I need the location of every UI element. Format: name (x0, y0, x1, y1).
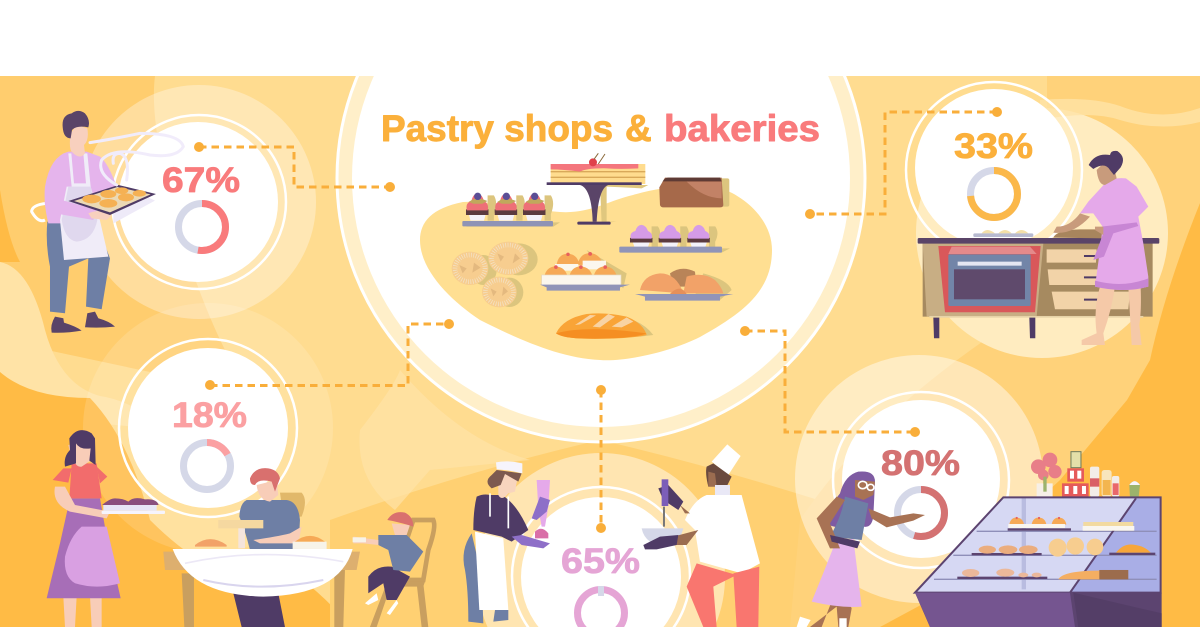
title: Pastry shops (381, 108, 613, 149)
pastries lower shelf (957, 569, 1128, 579)
connector 33% (810, 112, 997, 214)
donut 18% (184, 442, 230, 490)
donut 33% (970, 170, 1018, 218)
tray of dough (973, 230, 1033, 237)
family at table (47, 430, 434, 627)
trousers (47, 222, 110, 313)
circle 80% (795, 355, 1043, 603)
chocolate loaf (659, 178, 729, 207)
connector 67% (199, 147, 390, 187)
cabinet base (915, 593, 1162, 627)
red cupcakes (462, 193, 560, 227)
tray with croissants (68, 185, 156, 223)
arms (1053, 213, 1103, 235)
sweater (45, 152, 117, 223)
donut 67% (178, 204, 226, 250)
woman at oven counter (918, 151, 1159, 345)
circle 65% (477, 453, 725, 627)
layer cake on stand (547, 153, 648, 225)
value 80%: 80% (881, 444, 960, 483)
display case (915, 497, 1162, 627)
woman with cupcakes (47, 430, 165, 627)
value 65%: 65% (561, 542, 640, 581)
baker man with tray (32, 111, 183, 333)
connector dots (194, 107, 1002, 533)
croissants plate (635, 269, 733, 301)
counter (918, 238, 1159, 338)
donut 80% (898, 490, 944, 536)
head (70, 125, 88, 156)
title: & (625, 108, 652, 149)
head (1097, 163, 1117, 185)
connector 80% (745, 331, 915, 432)
value 67%: 67% (162, 161, 240, 200)
purple cupcakes (619, 225, 730, 253)
two pastry chefs (463, 444, 760, 627)
legs (1082, 287, 1142, 345)
connector lines (199, 112, 997, 528)
tray of buns (540, 250, 630, 291)
pastries top shelf (1008, 517, 1134, 531)
man at table (233, 468, 305, 627)
circle 33% (906, 82, 1082, 258)
value 33%: 33% (954, 127, 1033, 166)
shopper (797, 471, 925, 627)
pretzel rolls (452, 242, 538, 307)
rolling pin dough (1053, 229, 1105, 238)
shopper and display case (797, 452, 1162, 627)
dress (1080, 178, 1148, 290)
pastries middle shelf (972, 537, 1155, 557)
female pastry chef (463, 461, 550, 623)
table spread (163, 520, 360, 627)
arm (45, 198, 97, 220)
steam (90, 133, 183, 185)
child on chair (353, 512, 434, 627)
apron (60, 153, 108, 260)
central circle (336, 76, 866, 444)
male chef (642, 444, 760, 627)
title (381, 108, 820, 149)
pastry illustrations (452, 153, 733, 339)
food backdrop blob (420, 185, 772, 360)
connector 18% (210, 324, 449, 386)
donut 65% (578, 586, 624, 627)
bread loaf (556, 313, 653, 339)
title: bakeries (664, 108, 820, 149)
connector 65% (600, 390, 602, 528)
circle 18% (83, 303, 333, 553)
shelf goods (1031, 452, 1140, 497)
circle 67% (82, 85, 316, 319)
value 18%: 18% (172, 396, 247, 435)
